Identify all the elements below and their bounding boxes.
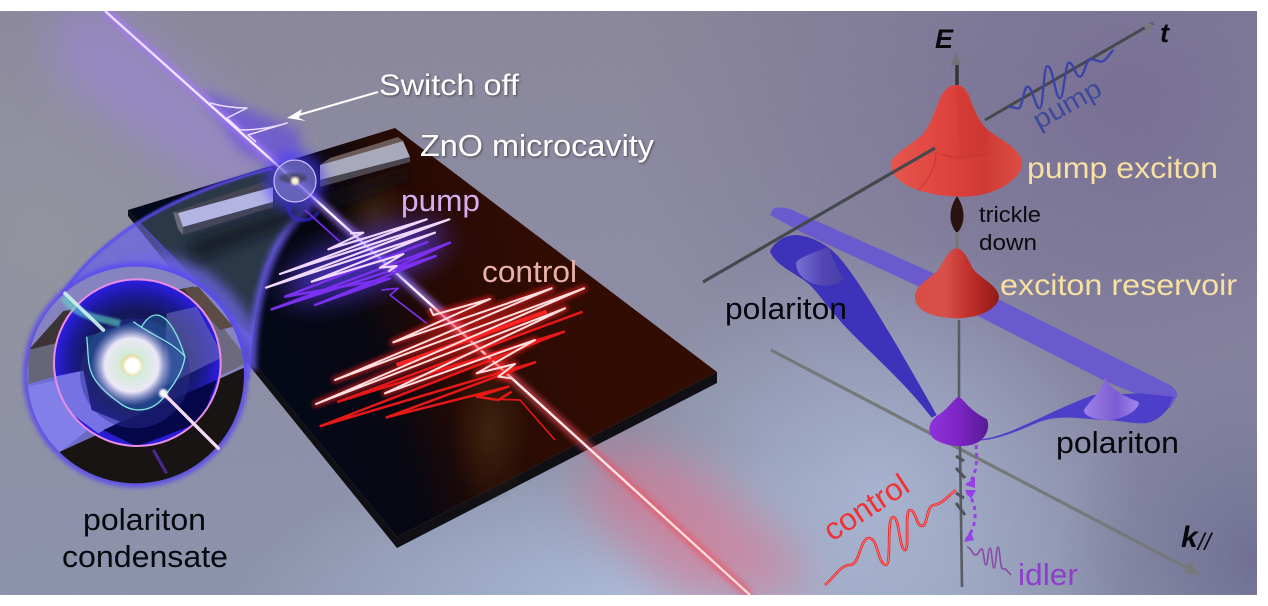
- label: control wave: control: [817, 467, 915, 548]
- polariton peak left: [796, 247, 844, 286]
- inner disc contents: [54, 307, 223, 447]
- label: Switch off: Switch off: [379, 69, 520, 102]
- label: ZnO microcavity: ZnO microcavity: [420, 128, 655, 163]
- switch-off pulses on beam: [210, 103, 287, 142]
- outer disc stripes: [28, 286, 244, 484]
- laser beam: [105, 11, 750, 595]
- dotted scattering arrows: [964, 445, 977, 542]
- energy diagram: right polariton branch: [980, 393, 1173, 441]
- label: polariton condensate: [63, 508, 227, 568]
- ZnO microcavity rod: [173, 137, 410, 262]
- label: trickle down: [979, 202, 1041, 255]
- exciton reservoir peak: [915, 248, 999, 318]
- purple and red beam glow on surface: [50, 11, 800, 595]
- control wave: [825, 490, 956, 585]
- label: trickle down: down: [979, 230, 1037, 255]
- label: exciton reservoir: exciton reservoir: [1000, 269, 1237, 302]
- control pulse, bright trace: [316, 288, 584, 404]
- trickle-down neck: [950, 196, 964, 232]
- energy diagram: left polariton branch: [770, 235, 937, 418]
- label: k parallel axis: k: [1181, 521, 1198, 554]
- label: k parallel axis: //: [1196, 529, 1213, 556]
- label: pump on plate: pump: [401, 183, 480, 218]
- polariton peak right: [1084, 377, 1139, 420]
- time axis near segment: [703, 148, 935, 282]
- label: control on plate: control: [482, 254, 577, 289]
- label: trickle down: trickle: [979, 202, 1041, 227]
- label: pump exciton: pump exciton: [1027, 152, 1218, 185]
- label: pump wave: pump: [1027, 73, 1107, 135]
- pump wave: [1008, 50, 1113, 108]
- k-parallel axis: [771, 350, 1200, 575]
- time axis far segment: [985, 23, 1153, 120]
- energy axis: [951, 53, 965, 587]
- label: t axis: t: [1160, 18, 1170, 48]
- ZnO substrate plate: [128, 128, 717, 548]
- control pulse, shadow trace: [321, 312, 583, 440]
- label: polariton left: polariton: [725, 291, 847, 326]
- magnifier circle on microcavity: [265, 151, 325, 220]
- polariton peak centre: [929, 397, 988, 446]
- magnified polariton condensate lens: [27, 267, 260, 497]
- label: polariton condensate: condensate: [62, 539, 228, 574]
- lens flare connecting microcavity to magnified view: [58, 166, 316, 380]
- pump exciton peak: [891, 85, 1022, 197]
- pump pulse glow: [276, 208, 454, 316]
- idler wave: [967, 547, 1011, 575]
- label: idler: idler: [1018, 557, 1078, 592]
- label: Switch off arrow: [287, 92, 378, 121]
- label: E axis: E: [935, 24, 954, 54]
- energy diagram: rear polariton band: [770, 208, 1177, 408]
- pump pulse, bright trace: [266, 219, 449, 288]
- pump pulse, shadow trace: [272, 210, 450, 323]
- label: polariton condensate: polariton: [83, 502, 206, 537]
- label: polariton right: polariton: [1056, 425, 1179, 460]
